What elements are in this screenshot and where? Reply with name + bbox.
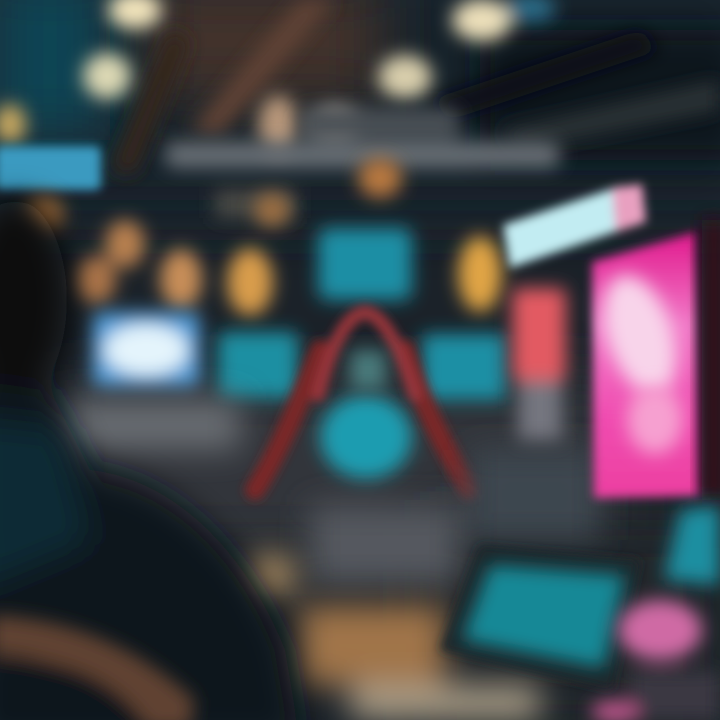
foreground pink objects — [591, 600, 720, 720]
laptop: dark body — [440, 545, 640, 690]
centre light stem between arches — [350, 350, 386, 390]
silhouette: person foreground — [0, 200, 300, 720]
screen: lower centre teal — [320, 395, 412, 479]
screen: white glowing left — [92, 312, 200, 388]
floor wood — [246, 553, 540, 720]
screen: red coral panel — [512, 288, 566, 440]
laptop: teal screen right edge — [664, 505, 720, 585]
screen: middle-left teal — [218, 332, 298, 398]
screen: middle-right teal — [422, 334, 506, 400]
screen: large pink panel — [590, 220, 720, 500]
screen: white angled sign — [503, 184, 646, 268]
laptop: teal screen foreground — [462, 565, 625, 668]
silhouette: person arm band — [0, 615, 195, 720]
stage floor grey — [60, 400, 600, 585]
ceiling beams — [110, 0, 720, 175]
screen: top centre teal — [318, 228, 412, 300]
grey truss banner — [165, 108, 560, 218]
screen: left blue sign — [0, 146, 101, 190]
orange lanterns — [24, 158, 502, 316]
red arch structure — [255, 312, 470, 490]
ceiling lights — [0, 0, 556, 155]
